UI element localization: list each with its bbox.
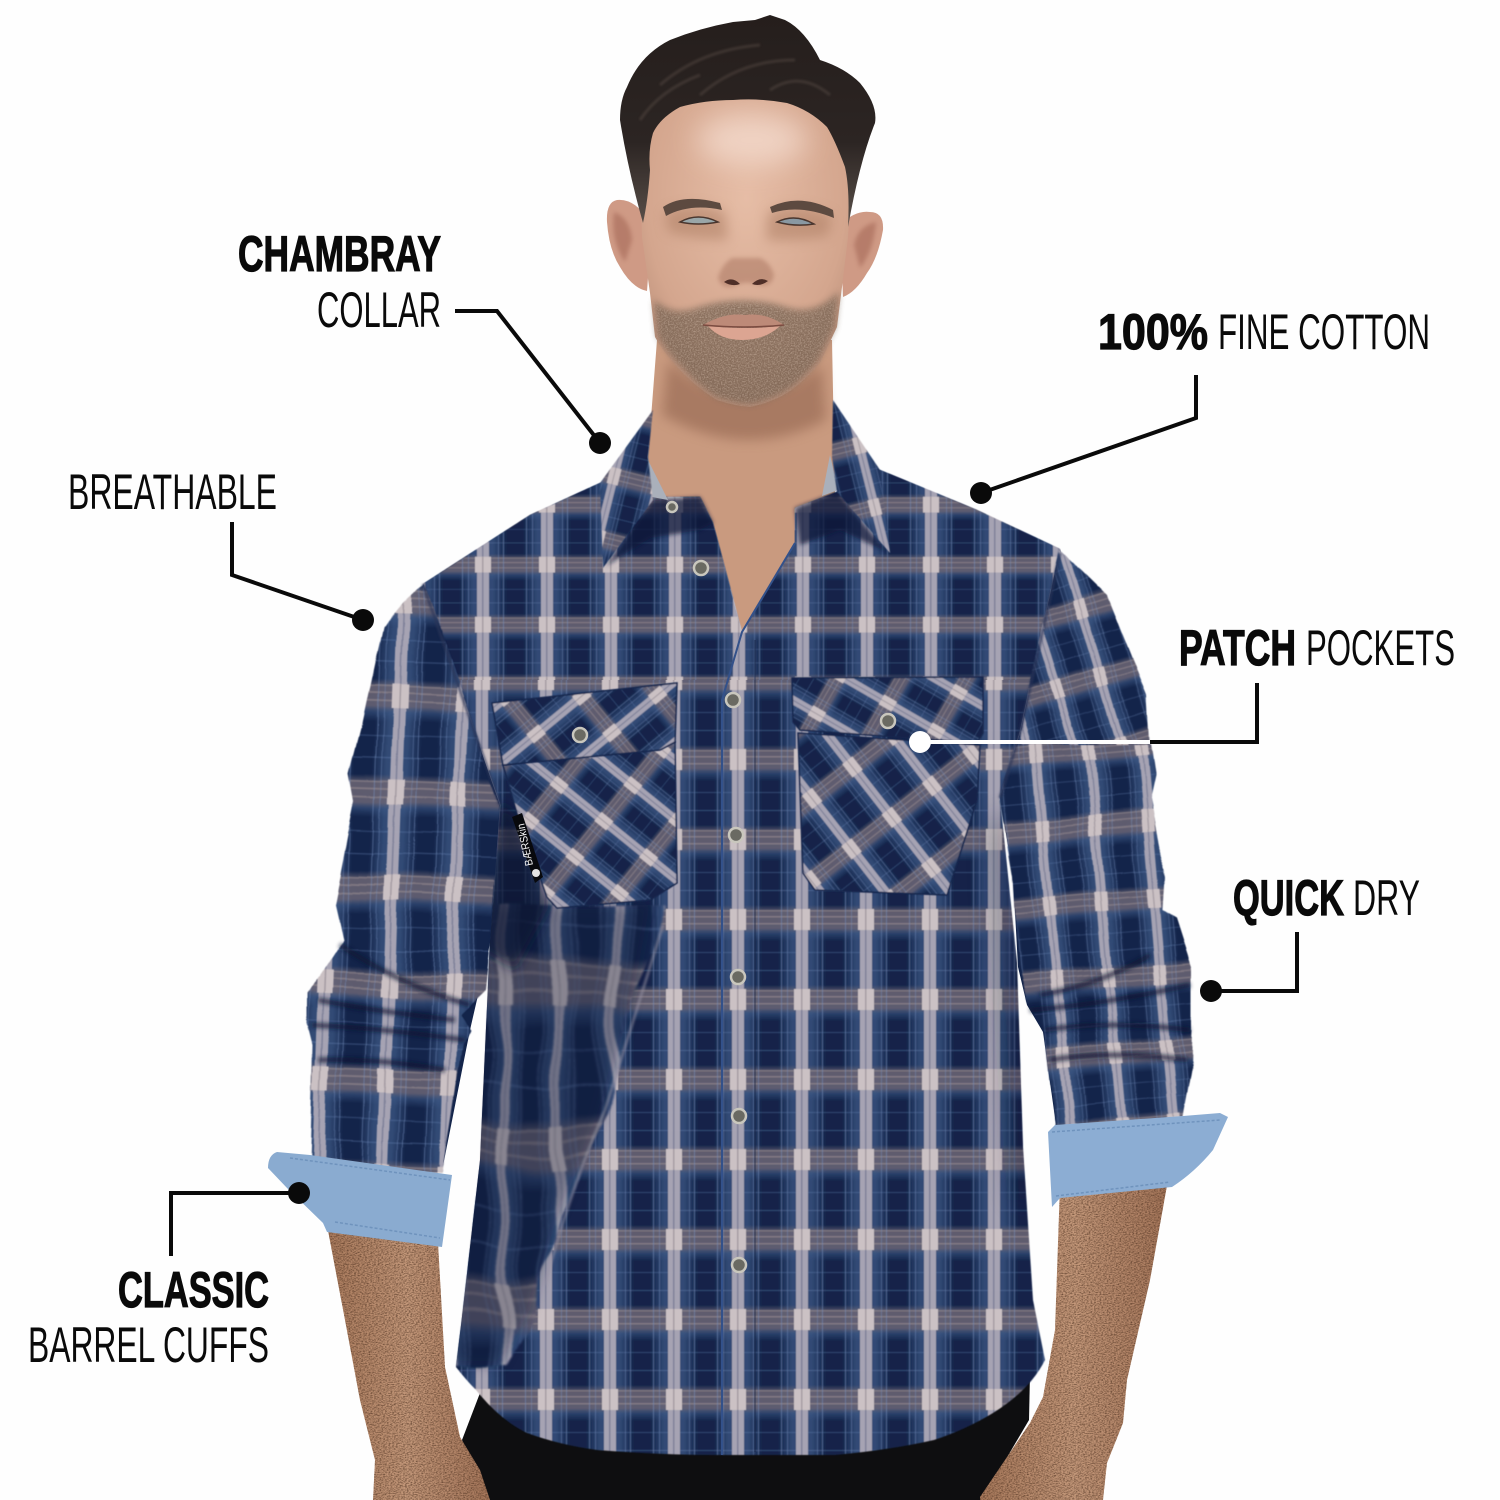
- chest plaid: [422, 469, 1060, 680]
- hair strands: [640, 45, 830, 120]
- left elbow creases: [312, 945, 470, 1070]
- callout: fine cotton: 100%: [1098, 304, 1208, 360]
- callout: barrel cuffs: CLASSIC: [118, 1262, 269, 1318]
- right eyebrow: [770, 201, 834, 218]
- left forearm and hand: [326, 1220, 490, 1500]
- callout: chambray collar: [238, 226, 611, 454]
- sleeve underlay: [410, 549, 1100, 1166]
- callout: barrel cuffs: BARREL CUFFS: [28, 1317, 269, 1373]
- right ear inner: [854, 222, 876, 268]
- collar lining: [648, 455, 838, 500]
- nose: [718, 258, 774, 287]
- upper lip: [703, 314, 784, 327]
- hair: [620, 15, 875, 227]
- right forearm and hand: [980, 1180, 1168, 1500]
- right sleeve lower: [1000, 740, 1193, 1128]
- trousers: [462, 1373, 1030, 1500]
- left ear: [607, 200, 652, 291]
- under collar shadows: [606, 492, 887, 566]
- right elbow creases: [1030, 955, 1190, 1060]
- neck shadow: [662, 360, 826, 440]
- eye socket shadows: [665, 206, 832, 240]
- fold shadows and drape: [450, 800, 1028, 1365]
- callout: patch pockets: [909, 620, 1455, 753]
- figure: man wearing plaid shirt: [268, 15, 1228, 1500]
- right ear: [840, 212, 883, 297]
- right sleeve: [1000, 549, 1193, 1128]
- shirt buttons: [573, 502, 895, 1272]
- callout: fine cotton: [970, 304, 1430, 504]
- right cuff: [1048, 1113, 1228, 1207]
- neck: [648, 340, 835, 632]
- pocket tag: [512, 813, 543, 883]
- left eye: [680, 217, 718, 224]
- stubble beard: [654, 292, 839, 405]
- callout: chambray collar: COLLAR: [317, 282, 441, 338]
- placket: [722, 543, 795, 1455]
- sleeve seams: [423, 553, 1060, 805]
- left collar: [600, 410, 653, 568]
- face: [640, 85, 852, 407]
- left sleeve: [307, 584, 500, 1172]
- pocket tag: BÆRSkin: [515, 822, 536, 867]
- left eyebrow: [663, 199, 722, 216]
- callout: quick dry: DRY: [1353, 870, 1420, 926]
- forehead highlight: [697, 114, 807, 166]
- right eye: [777, 218, 814, 225]
- callout: barrel cuffs: [28, 1182, 310, 1373]
- callout: patch pockets: PATCH: [1179, 620, 1296, 676]
- left cuff: [268, 1152, 452, 1247]
- callout: breathable: BREATHABLE: [68, 464, 277, 520]
- callout: quick dry: [1200, 870, 1420, 1002]
- callout: chambray collar: CHAMBRAY: [238, 226, 441, 282]
- mouth line: [703, 325, 784, 327]
- callout: quick dry: QUICK: [1233, 870, 1344, 926]
- shirt body: [423, 470, 1060, 1455]
- left chest pocket: [492, 683, 677, 908]
- right collar: [832, 400, 890, 553]
- left ear inner: [613, 212, 632, 262]
- right chest pocket: [792, 677, 983, 895]
- callout: breathable: [68, 464, 374, 631]
- nostrils: [724, 279, 768, 285]
- lower lip: [708, 326, 780, 340]
